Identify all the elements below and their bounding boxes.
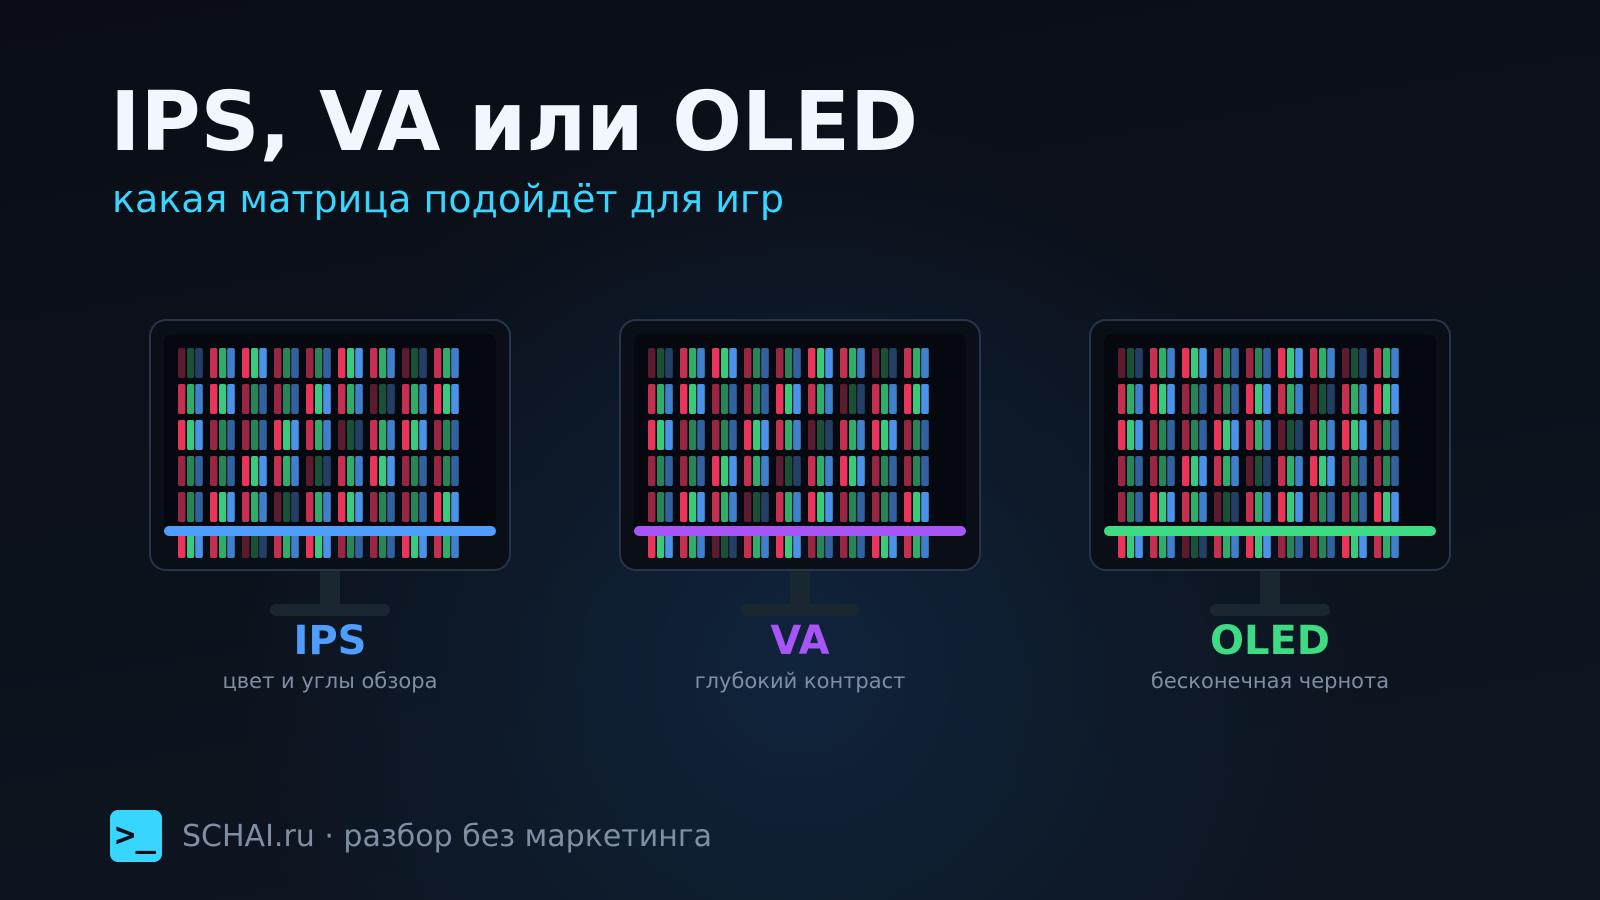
caption: IPS: цвет и углы обзора — [223, 669, 437, 693]
subpixel grid — [648, 348, 929, 558]
caption: OLED: бесконечная чернота — [1151, 669, 1389, 693]
footer text: SCHAI.ru · разбор без маркетинга — [182, 819, 712, 854]
screen — [164, 334, 496, 531]
subtitle: какая матрица подойдёт для игр — [112, 177, 784, 221]
monitor stand — [740, 570, 860, 616]
icon: terminal logo: >_ — [115, 815, 156, 855]
monitor body — [150, 320, 510, 570]
label: IPS: IPS — [293, 618, 367, 664]
subpixel grid — [1118, 348, 1399, 558]
panel: IPS monitor — [150, 320, 510, 693]
screen — [634, 334, 966, 531]
accent bar: OLED — [1104, 526, 1436, 536]
label: VA: VA — [770, 618, 830, 664]
monitor body — [620, 320, 980, 570]
monitor stand — [270, 570, 390, 616]
title: IPS, VA или OLED — [110, 75, 918, 170]
caption: VA: глубокий контраст — [695, 669, 905, 693]
accent bar: VA — [634, 526, 966, 536]
panel: VA monitor — [620, 320, 980, 693]
label: OLED: OLED — [1210, 618, 1330, 664]
icon: terminal logo — [110, 810, 162, 862]
subpixel grid — [178, 348, 459, 558]
screen — [1104, 334, 1436, 531]
monitor body — [1090, 320, 1450, 570]
monitor stand — [1210, 570, 1330, 616]
accent bar: IPS — [164, 526, 496, 536]
panel: OLED monitor — [1090, 320, 1450, 693]
